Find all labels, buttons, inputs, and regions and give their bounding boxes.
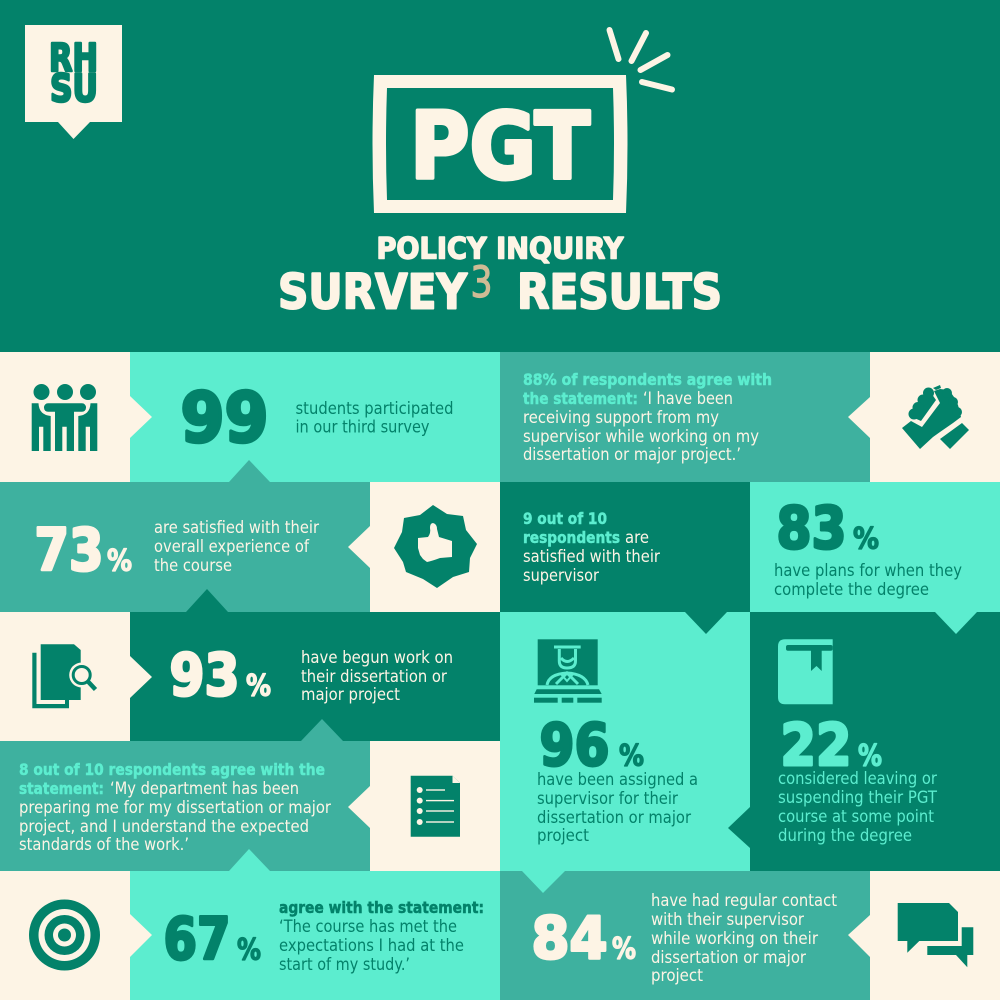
stat: 22 percent considered leaving: suspending their PGT (778, 788, 938, 807)
stat: 9 out of 10 satisfied with supervisor: 9 out of 10 (523, 509, 607, 528)
stat: 83 percent plans: complete the degree (774, 580, 929, 599)
icon: target (29, 900, 100, 970)
stat: 99 students (180, 378, 454, 458)
arrows: connectors between panels (130, 396, 977, 957)
icon: book with bookmark (778, 639, 833, 704)
stat: 88 percent support: 88% of respondents agree with (523, 370, 772, 389)
stat: 84 percent regular contact (532, 891, 837, 985)
stat: 96 percent assigned: dissertation or major (537, 808, 691, 827)
stat: 84 percent regular contact: dissertation or major (651, 948, 806, 967)
stat: 99 students: in our third survey (296, 418, 430, 436)
logo: RHSU speech bubble: SU (50, 66, 98, 110)
stat: 93 percent begun work: % (246, 668, 271, 702)
stat: 22 percent considered leaving: during the degree (778, 826, 912, 845)
stat: 73 percent satisfied: the course (154, 556, 232, 575)
icon: thumbs up badge (394, 505, 477, 588)
stat: 83 percent plans: % (853, 522, 879, 556)
stat: 83 percent plans: have plans for when they (774, 561, 962, 580)
stat: 67 percent expectations: expectations I had at the (279, 936, 464, 955)
stat: 73 percent satisfied: are satisfied with their (154, 518, 319, 537)
logo: RHSU speech bubble: RH (49, 36, 98, 80)
stat: 8 out of 10 prepared: project, and I understand the expected (19, 817, 309, 836)
heading: survey 3 results: SURVEY (278, 264, 468, 320)
icon: documents with magnifier (32, 644, 96, 708)
stat: 9 out of 10 satisfied with supervisor: respondents (523, 528, 620, 547)
stat: 67 percent expectations (164, 898, 484, 974)
icon: handshake fist (902, 385, 969, 449)
stat: 88 percent support (523, 370, 772, 464)
stat: 84 percent regular contact: % (612, 932, 636, 966)
icon: checklist document (411, 776, 460, 837)
stat: 84 percent regular contact: have had regular contact (651, 891, 837, 910)
heading: survey 3 results: RESULTS (517, 264, 722, 320)
stat: 88 percent support: receiving support from my (523, 408, 719, 427)
stat: 84 percent regular contact: with their supervisor (651, 910, 804, 929)
stat: 93 percent begun work: major project (301, 685, 400, 704)
stat: 22 percent considered leaving: % (858, 738, 882, 772)
stat: 22 percent considered leaving: 22 (780, 711, 852, 779)
stat: 22 percent considered leaving: course at some point (778, 807, 934, 826)
stat: 99 students: 99 (180, 378, 268, 458)
stat: 67 percent expectations: ‘The course has met the (279, 917, 457, 936)
stat: 96 percent assigned: 96 (540, 711, 610, 779)
heading: survey 3 results (278, 258, 722, 320)
stat: 96 percent assigned: project (537, 826, 589, 845)
stat: 88 percent support: ‘I have been (643, 389, 733, 408)
title icon: PGT screen (372, 30, 672, 213)
stat: 8 out of 10 prepared: statement: (19, 779, 104, 798)
stat: 9 out of 10 satisfied with supervisor: are (625, 528, 649, 547)
stat: 96 percent assigned: have been assigned a (537, 770, 698, 789)
icon: chat bubbles (898, 903, 973, 967)
stat: 84 percent regular contact: project (651, 966, 703, 985)
stat: 8 out of 10 prepared (19, 760, 331, 854)
stat: 93 percent begun work: 93 (170, 641, 240, 709)
stat: 93 percent begun work: their dissertation or (301, 667, 447, 686)
title icon: PGT screen: PGT (410, 93, 590, 200)
stat: 73 percent satisfied: overall experience of (154, 537, 310, 556)
stat: 22 percent considered leaving: considered leaving or (778, 769, 937, 788)
stat: 84 percent regular contact: 84 (532, 904, 608, 972)
stat: 88 percent support: the statement: (523, 389, 638, 408)
stat: 93 percent begun work (170, 641, 453, 709)
stat: 99 students: students participated (296, 399, 454, 418)
heading: policy inquiry: POLICY INQUIRY (376, 232, 624, 266)
logo: RHSU speech bubble (25, 25, 122, 139)
stat: 9 out of 10 satisfied with supervisor: supervisor (523, 566, 599, 585)
stat: 22 percent considered leaving (778, 711, 938, 845)
stat: 93 percent begun work: have begun work on (301, 648, 453, 667)
icon: three people (32, 384, 97, 451)
stat: 8 out of 10 prepared: preparing me for my dissertation or major (19, 798, 331, 817)
stat: 84 percent regular contact: while working on their (651, 929, 818, 948)
stat: 73 percent satisfied (34, 516, 319, 584)
stat: 8 out of 10 prepared: standards of the work.’ (19, 835, 189, 854)
stat: 96 percent assigned: % (619, 738, 644, 772)
stat: 67 percent expectations: start of my study.’ (279, 955, 410, 974)
stat: 67 percent expectations: % (237, 932, 261, 966)
stat: 88 percent support: supervisor while working on my (523, 427, 759, 446)
stat: 8 out of 10 prepared: ‘My department has been (110, 779, 299, 798)
stat: 96 percent assigned (537, 711, 698, 845)
stat: 88 percent support: dissertation or major project.’ (523, 445, 741, 464)
stat: 9 out of 10 satisfied with supervisor (523, 509, 660, 585)
stat: 8 out of 10 prepared: 8 out of 10 respondents agree with the (19, 760, 325, 779)
heading: survey 3 results: 3 (470, 258, 492, 308)
stat: 73 percent satisfied: 73 (34, 516, 104, 584)
icon: supervisor at desk (534, 639, 602, 703)
stat: 73 percent satisfied: % (107, 544, 132, 578)
stat: 96 percent assigned: supervisor for their (537, 789, 678, 808)
stat: 83 percent plans: 83 (776, 494, 846, 562)
stat: 67 percent expectations: agree with the statement: (279, 898, 484, 917)
stat: 9 out of 10 satisfied with supervisor: satisfied with their (523, 547, 660, 566)
stat: 67 percent expectations: 67 (164, 905, 230, 973)
stat: 83 percent plans (774, 494, 962, 599)
panel: row backgrounds (0, 352, 1000, 1000)
